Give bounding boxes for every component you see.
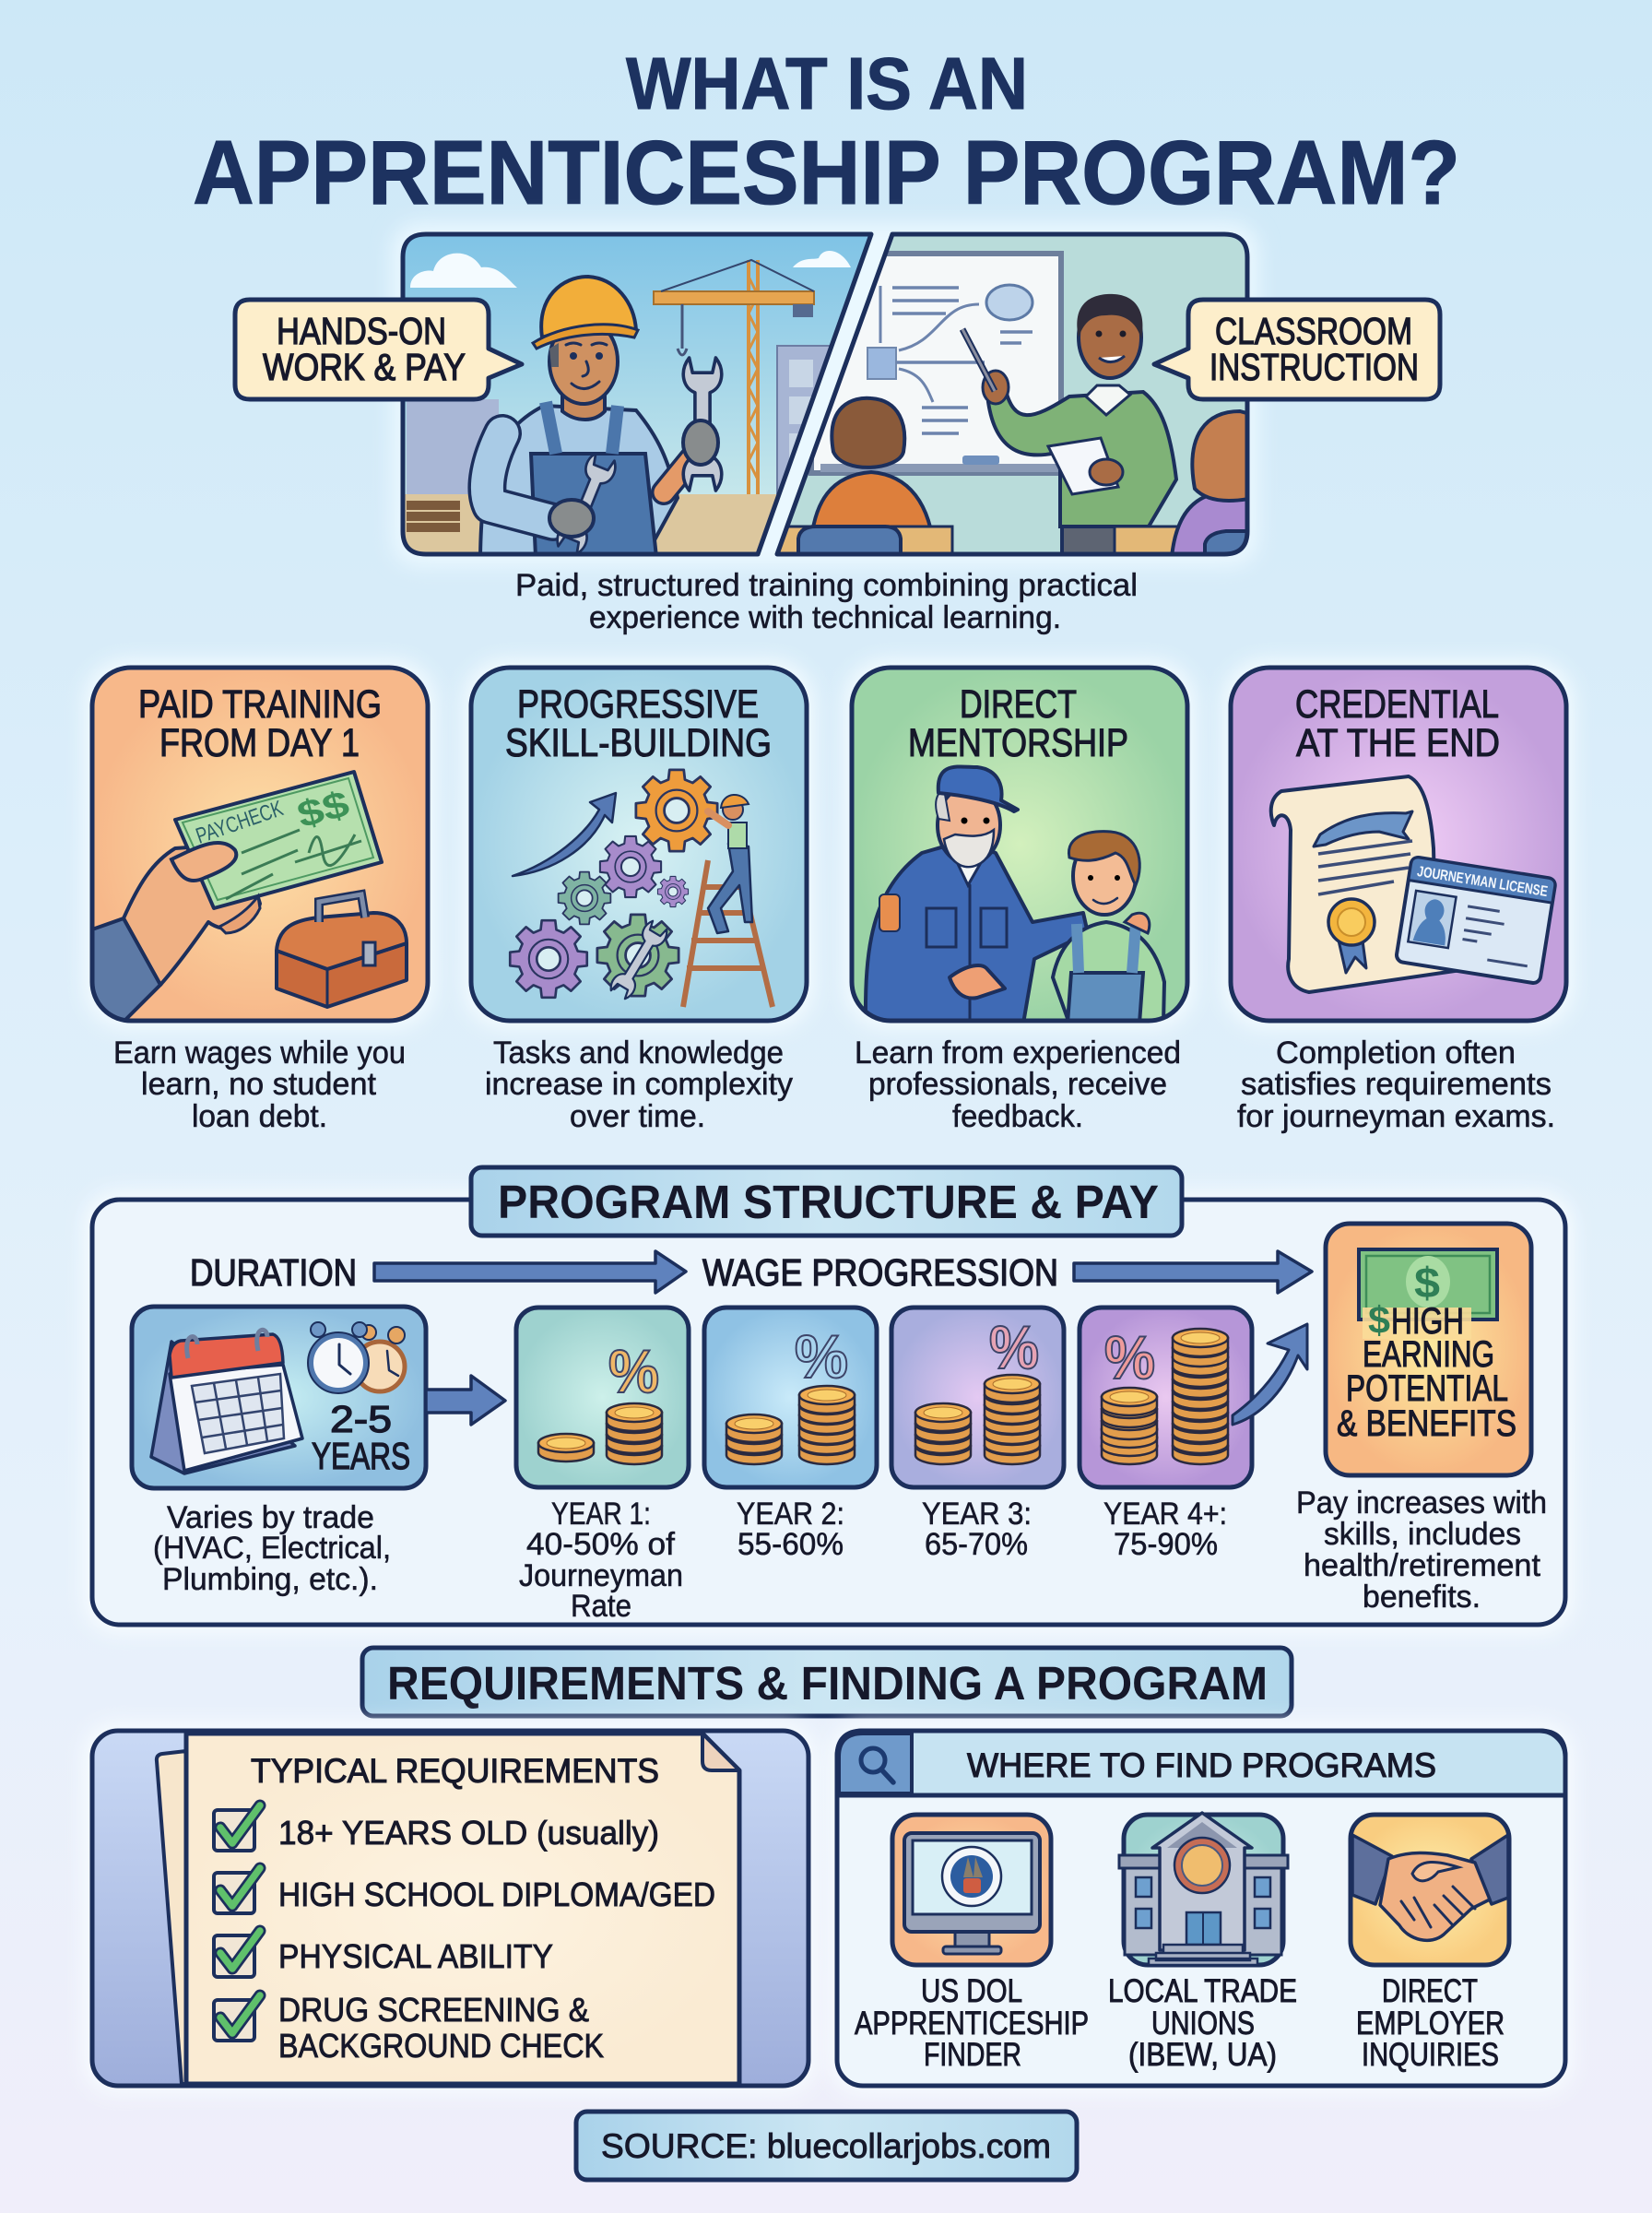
icon: coin stacks <box>726 1386 855 1464</box>
text: 2-5 years <box>312 1398 410 1477</box>
label: EMPLOYER <box>1356 2006 1504 2041</box>
checklist item: diploma: HIGH SCHOOL DIPLOMA/GED <box>278 1876 715 1913</box>
text: high earning potential and benefits: POTENTIAL <box>1346 1368 1508 1409</box>
icon: gears, ladder and worker <box>510 770 773 1007</box>
label: UNIONS <box>1151 2006 1255 2041</box>
checklist item: age: 18+ YEARS OLD (usually) <box>278 1814 659 1852</box>
heading: SKILL-BUILDING <box>505 721 772 765</box>
panel: progressive skill-building <box>464 660 814 1134</box>
icon: money bill <box>1359 1249 1497 1320</box>
arrow: duration to year 1 <box>426 1376 505 1425</box>
description <box>855 1035 1181 1134</box>
text: high earning potential and benefits: EARNING <box>1363 1334 1494 1375</box>
description: increase in complexity <box>485 1067 793 1102</box>
arrow: rising to high earning <box>1233 1324 1307 1425</box>
text: varies by trade: Plumbing, etc.). <box>162 1562 378 1597</box>
heading: WHERE TO FIND PROGRAMS <box>967 1746 1436 1784</box>
subtitle: experience with technical learning. <box>589 600 1061 635</box>
arrow: duration to wage progression <box>374 1251 686 1293</box>
checklist item: screening: BACKGROUND CHECK <box>278 2027 604 2065</box>
heading <box>138 682 382 765</box>
label: APPRENTICESHIP <box>855 2006 1089 2041</box>
panel: duration calendar <box>132 1307 426 1488</box>
icon: calendar <box>151 1330 302 1473</box>
text: pay increases: benefits. <box>1363 1580 1481 1615</box>
panel: where to find programs <box>830 1723 1573 2093</box>
icon: percent: % <box>795 1322 848 1391</box>
callout: classroom instruction: INSTRUCTION <box>1210 346 1419 388</box>
description: professionals, receive <box>868 1067 1167 1102</box>
icon: hand holding paycheck and toolbox <box>92 772 407 1021</box>
text: pay increases: health/retirement <box>1304 1548 1541 1583</box>
icon: money bill: $ <box>1414 1259 1440 1307</box>
icon: mentor and young apprentice <box>866 766 1164 1024</box>
subtitle: Paid, structured training combining practical <box>515 568 1138 603</box>
description <box>113 1035 406 1134</box>
description: Tasks and knowledge <box>493 1035 784 1071</box>
text: varies by trade: (HVAC, Electrical, <box>153 1531 391 1566</box>
checklist item: physical ability <box>214 1931 553 1977</box>
arrow: wage progression to earnings <box>1074 1251 1312 1293</box>
text: pay increases: skills, includes <box>1324 1517 1521 1552</box>
description: feedback. <box>952 1099 1083 1134</box>
icon: coin stacks <box>915 1375 1040 1464</box>
callout: classroom instruction <box>1154 300 1440 399</box>
title <box>193 42 1460 223</box>
heading: FROM DAY 1 <box>159 721 360 765</box>
panel: program structure and pay <box>85 1167 1573 1633</box>
icon: union building <box>1119 1813 1288 1965</box>
panel: direct mentorship <box>844 660 1195 1134</box>
text: 2-5 years: YEARS <box>312 1435 410 1477</box>
icon: percent: % <box>608 1337 659 1405</box>
icon: monitor <box>904 1833 1040 1954</box>
label: wage progression: WAGE PROGRESSION <box>702 1251 1058 1294</box>
text: pay increases: Pay increases with <box>1296 1485 1547 1521</box>
icon: hand holding paycheck and toolbox: $$ <box>293 784 353 836</box>
heading: TYPICAL REQUIREMENTS <box>251 1752 659 1790</box>
label <box>1356 1973 1504 2073</box>
teacher <box>988 387 1176 527</box>
heading: AT THE END <box>1296 721 1500 765</box>
label: INQUIRIES <box>1362 2037 1499 2073</box>
illustration: classroom teacher <box>774 234 1254 560</box>
heading <box>1295 682 1500 765</box>
icon: diploma and journeyman license <box>1271 776 1556 992</box>
worker body <box>480 406 678 557</box>
heading: requirements and finding a program: REQUIREMENTS & FINDING A PROGRAM <box>387 1657 1268 1710</box>
icon: diploma and journeyman license: JOURNEYMAN LICENSE <box>1416 864 1549 900</box>
label: DIRECT <box>1382 1973 1478 2009</box>
subtitle <box>515 568 1138 635</box>
icon: alarm clocks <box>308 1322 405 1393</box>
panel: credential at the end <box>1223 660 1574 1134</box>
text: year 1 rate: YEAR 1: <box>551 1497 651 1532</box>
text: year 4+ rate: 75-90% <box>1114 1527 1218 1562</box>
checklist item: age <box>214 1805 659 1852</box>
text: year 1 rate: Rate <box>571 1589 631 1624</box>
text: pay increases <box>1296 1485 1547 1615</box>
callout: classroom instruction: CLASSROOM <box>1215 310 1412 352</box>
description: for journeyman exams. <box>1237 1099 1555 1134</box>
text: year 1 rate <box>519 1497 683 1624</box>
icon: coin stacks <box>1102 1329 1228 1464</box>
label: LOCAL TRADE <box>1108 1973 1297 2009</box>
description: loan debt. <box>192 1099 327 1134</box>
text: year 2 rate <box>737 1497 844 1562</box>
description: Learn from experienced <box>855 1035 1181 1071</box>
worker head <box>560 395 607 421</box>
title: WHAT IS AN <box>626 42 1028 124</box>
heading: PROGRESSIVE <box>517 682 759 727</box>
heading <box>908 682 1128 765</box>
text: high earning potential and benefits: & BENEFITS <box>1337 1403 1516 1444</box>
description <box>485 1035 793 1134</box>
hero panel: work and classroom illustration <box>392 223 1258 566</box>
callout: hands-on work and pay: WORK & PAY <box>263 346 466 388</box>
text: year 3 rate: YEAR 3: <box>922 1497 1032 1532</box>
checklist item: screening <box>214 1991 604 2065</box>
icon: hand holding paycheck and toolbox: PAYCHECK <box>193 796 287 849</box>
text: varies by trade: Varies by trade <box>167 1500 374 1535</box>
text: high earning potential and benefits: HIGH <box>1391 1301 1464 1342</box>
text: year 2 rate: 55-60% <box>738 1527 844 1562</box>
label: (IBEW, UA) <box>1128 2037 1277 2073</box>
label: duration: DURATION <box>190 1251 357 1294</box>
panel: paid training from day 1 <box>85 660 435 1134</box>
description: over time. <box>570 1099 705 1134</box>
panel: typical requirements <box>84 1723 816 2093</box>
description <box>1237 1035 1555 1134</box>
label <box>1108 1973 1297 2073</box>
heading: DIRECT <box>960 682 1077 727</box>
paper sheet <box>186 1734 739 2084</box>
text: year 3 rate: 65-70% <box>925 1527 1028 1562</box>
callout: hands-on work and pay: HANDS-ON <box>277 310 446 352</box>
heading tab: PROGRAM STRUCTURE & PAY <box>498 1176 1159 1228</box>
panel: high earning potential <box>1326 1224 1531 1475</box>
text: year 4+ rate <box>1103 1497 1227 1562</box>
description: learn, no student <box>141 1067 377 1102</box>
heading: PAID TRAINING <box>138 682 382 727</box>
icon: percent: % <box>1104 1323 1155 1391</box>
item: us dol finder <box>855 1815 1089 2073</box>
checklist item: diploma <box>214 1868 715 1913</box>
source badge: SOURCE: bluecollarjobs.com <box>601 2127 1051 2165</box>
title: APPRENTICESHIP PROGRAM? <box>193 122 1460 223</box>
text: year 2 rate: YEAR 2: <box>737 1497 844 1532</box>
callout: hands-on work and pay <box>235 300 522 399</box>
label: US DOL <box>921 1973 1022 2009</box>
text: year 1 rate: 40-50% of <box>526 1527 676 1562</box>
text: year 4+ rate: YEAR 4+: <box>1103 1497 1227 1532</box>
students and desks <box>811 470 931 526</box>
text: varies by trade <box>153 1500 391 1597</box>
text: high earning potential and benefits: $ <box>1368 1298 1390 1342</box>
description: satisfies requirements <box>1241 1067 1552 1102</box>
text: year 3 rate <box>922 1497 1032 1562</box>
description: Earn wages while you <box>113 1035 406 1071</box>
text: high earning potential and benefits <box>1337 1298 1516 1444</box>
icon: coin stacks <box>538 1403 662 1464</box>
illustration: hands-on construction worker <box>403 234 873 559</box>
checklist item: screening: DRUG SCREENING & <box>278 1991 589 2029</box>
icon: percent: % <box>989 1313 1039 1381</box>
text: year 1 rate: Journeyman <box>519 1558 683 1593</box>
checklist item: physical ability: PHYSICAL ABILITY <box>278 1937 553 1975</box>
label: FINDER <box>924 2037 1021 2073</box>
panel: year 4+ <box>1080 1308 1252 1562</box>
text: 2-5 years: 2-5 <box>330 1398 392 1440</box>
label <box>855 1973 1089 2073</box>
panel: year 2 <box>704 1308 877 1562</box>
header band <box>837 1731 1565 1795</box>
heading: MENTORSHIP <box>908 721 1128 765</box>
panel: year 1 <box>516 1308 689 1624</box>
item: local trade unions <box>1108 1813 1297 2073</box>
heading: CREDENTIAL <box>1295 682 1499 727</box>
source badge <box>576 2112 1077 2180</box>
heading <box>505 682 772 765</box>
panel: year 3 <box>891 1308 1064 1562</box>
icon: handshake <box>1352 1835 1508 1940</box>
item: direct employer inquiries <box>1351 1815 1509 2073</box>
icon: magnifying glass <box>861 1748 893 1782</box>
description: Completion often <box>1276 1035 1516 1071</box>
